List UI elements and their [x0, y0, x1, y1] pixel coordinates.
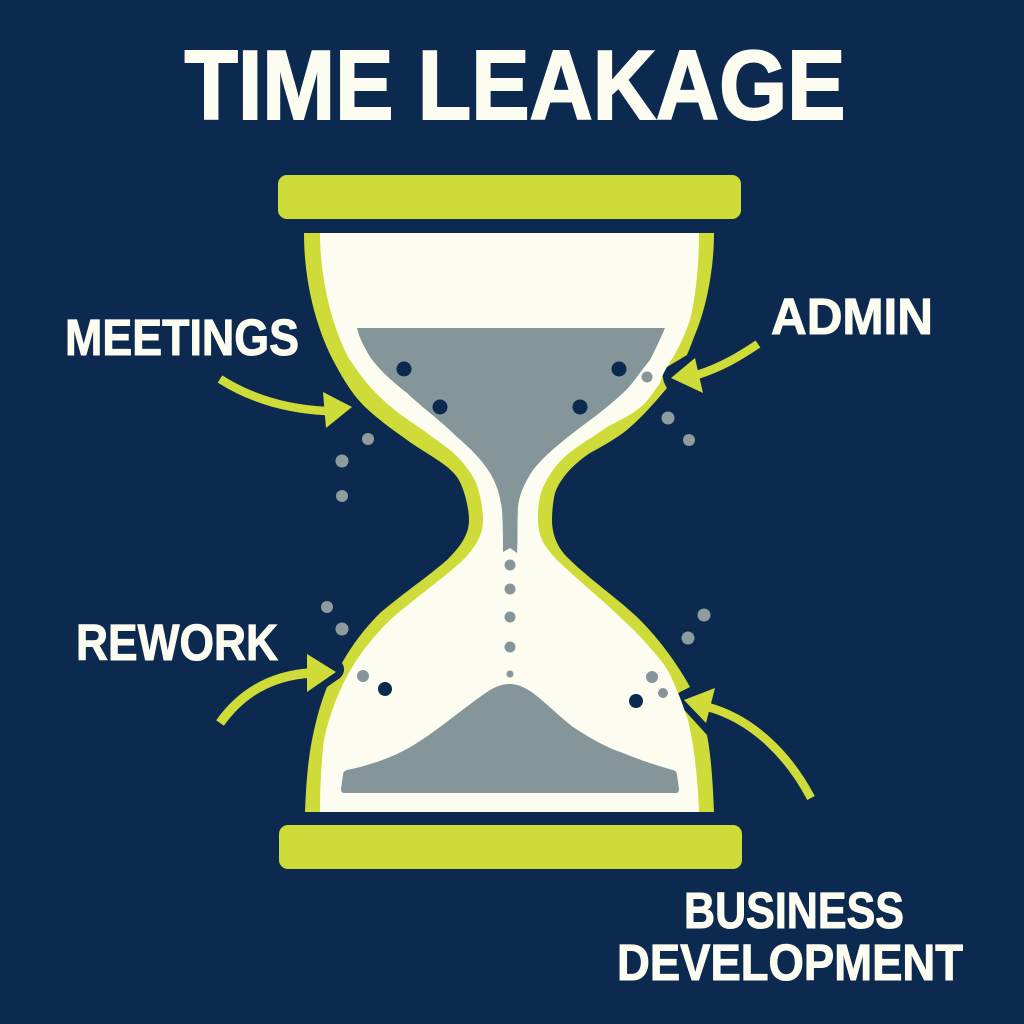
bottom cap	[279, 825, 742, 869]
falling sand grains	[504, 560, 516, 678]
title: TIME LEAKAGE	[184, 30, 846, 140]
label: business development	[617, 882, 963, 991]
arrow: business development	[684, 688, 811, 798]
top cap	[278, 175, 741, 219]
label: business development: DEVELOPMENT	[617, 934, 963, 991]
arrow: rework	[220, 654, 336, 723]
light grains inside	[357, 372, 668, 698]
label: business development: BUSINESS	[684, 882, 904, 939]
label: rework: REWORK	[76, 614, 278, 671]
arrow: meetings	[220, 379, 352, 428]
label: meetings: MEETINGS	[65, 309, 299, 366]
hourglass	[278, 175, 742, 869]
arrow: admin	[671, 344, 758, 393]
glass outline	[304, 233, 714, 812]
dark grains	[378, 362, 643, 708]
leaking particles	[321, 412, 710, 644]
bottom sand	[341, 684, 679, 793]
glass interior	[320, 233, 699, 812]
label: admin: ADMIN	[771, 288, 933, 345]
top sand	[357, 328, 665, 553]
